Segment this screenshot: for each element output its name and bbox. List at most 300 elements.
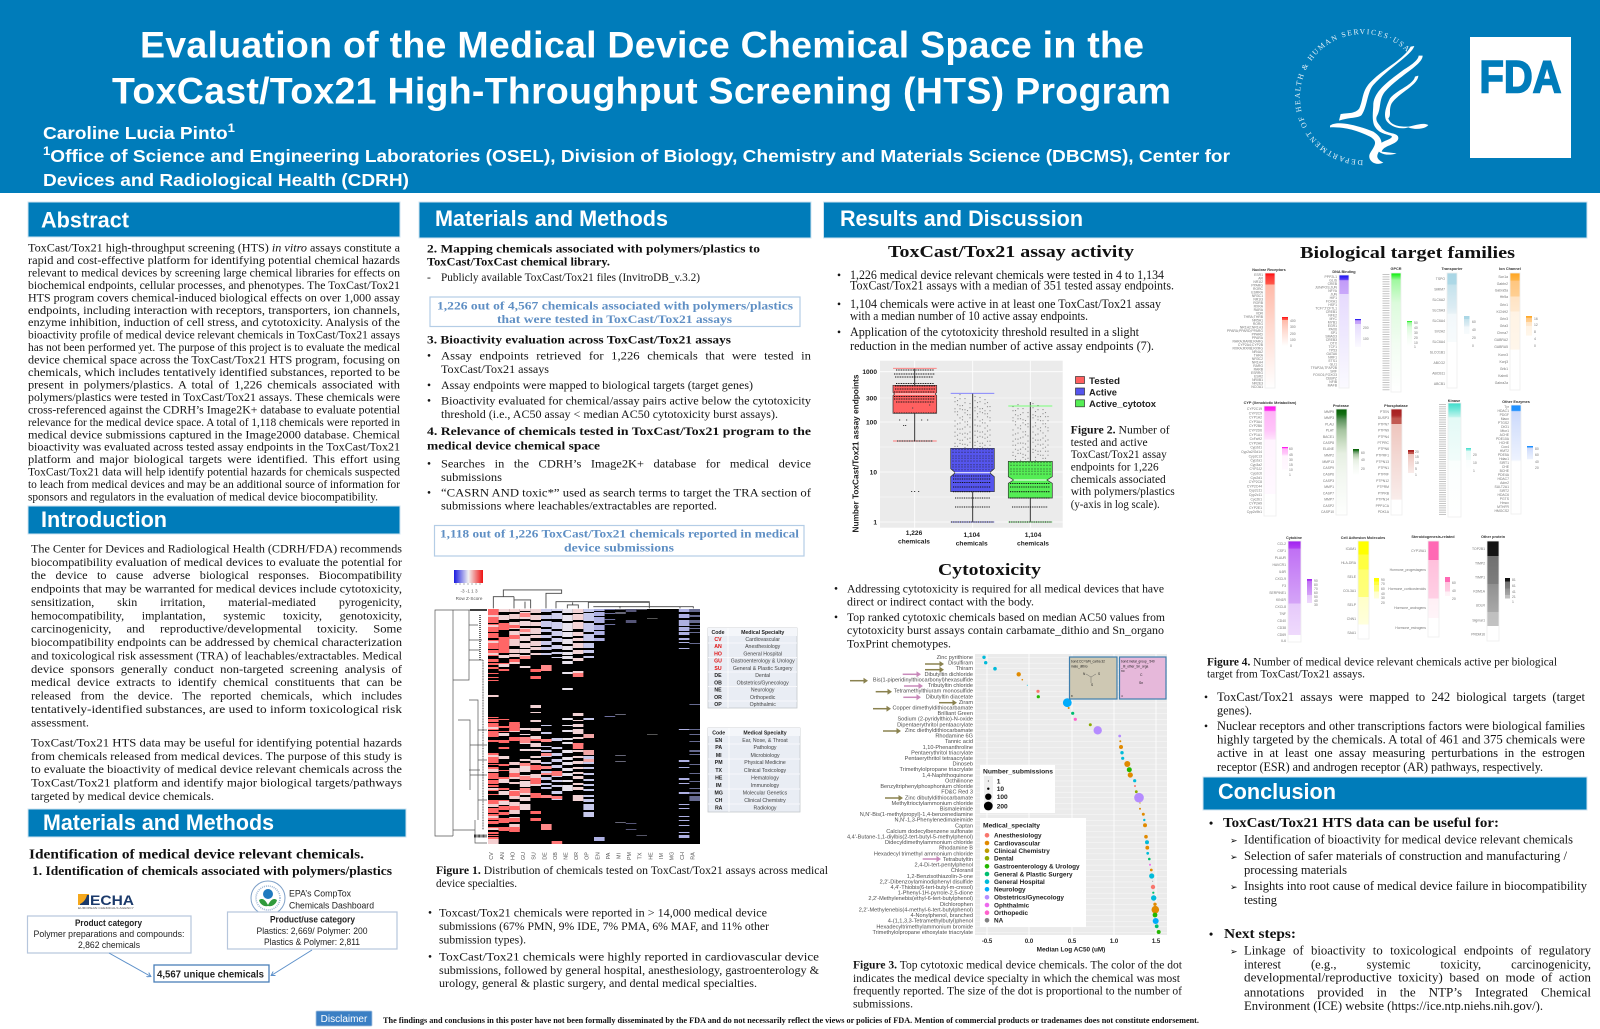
inset: carbamate dithio chemotype <box>1070 657 1117 699</box>
table: specialty codes 2: IM <box>716 783 722 789</box>
heatmap: cytokine: PLAUR <box>1275 556 1287 560</box>
column labels: EN <box>595 852 601 860</box>
heatmap: cytokine: CD40 <box>1277 619 1286 623</box>
heatmap: DNA binding: NFIB <box>1329 380 1338 384</box>
heatmap: steroidogenesis related: CYP19A1 <box>1411 549 1426 553</box>
table: specialty codes 2: Clinical Toxicology <box>744 768 787 774</box>
x axis labels: 1,104 <box>963 532 980 539</box>
heatmap: phosphatase: Phosphatase <box>1384 404 1408 408</box>
author and affiliation <box>43 121 1230 190</box>
heatmap: steroidogenesis related: 60 <box>1452 581 1456 585</box>
heatmap: DNA binding: CEBPZ <box>1326 376 1337 380</box>
caption: figure 2: chemicals associated <box>1071 474 1166 486</box>
text: assay activity bullets <box>837 268 1174 353</box>
text: abstract body: HTS program covers chemical-induced biological effects on over 1,000 assay <box>28 292 400 304</box>
heatmap: DNA binding: EGR1 <box>1328 324 1337 328</box>
caption: figure 4: target from ToxCast/Tox21 assays. <box>1207 668 1365 680</box>
column labels: PM <box>627 851 633 860</box>
heatmap: other enzymes: Hmox <box>1500 501 1509 505</box>
arrow: EPA to unique chemicals <box>272 950 312 975</box>
table: specialty codes 1: OR <box>714 695 722 701</box>
text: introduction paragraph 2: ToxCast/Tox21 platform and identify major biological targets/pathways <box>31 778 403 790</box>
heatmap: kinase: 10 <box>1473 461 1477 465</box>
text: submissions bullets: submission types). <box>439 934 526 946</box>
heading: conclusion <box>1203 777 1587 810</box>
heatmap: ion channel: GABRA5 <box>1494 345 1508 349</box>
heading: abstract <box>28 202 400 237</box>
bubbles <box>982 656 1161 934</box>
heatmap: cytokine: 40 <box>1314 599 1318 603</box>
heatmap: other protein: 41 <box>1512 590 1516 594</box>
table: specialty codes 1: GU <box>714 659 722 665</box>
heatmap: cytokine: 70 <box>1314 587 1318 591</box>
chemical names: 2,2'-Methylenebis(ethyl-6-tert-butylphenol) <box>868 896 973 902</box>
table: specialty codes 1: Anesthesiology <box>745 644 781 650</box>
table: specialty codes 2: PM <box>715 760 723 766</box>
heatmap: DNA binding: 100 <box>1363 337 1369 341</box>
heatmap: transporter: 40 <box>1472 328 1476 332</box>
heatmap: DNA binding: JUN/FOS;JUN <box>1315 286 1338 290</box>
heatmap: other enzymes: HDAC6 <box>1498 493 1509 497</box>
heatmap: transporter: SLCO1B1 <box>1430 350 1445 354</box>
heatmap: CYP xenobiotic metabolism: Cyc2d1 <box>1250 476 1262 480</box>
chart: biological target heatmaps figure 4 <box>1227 267 1539 643</box>
heatmap: steroidogenesis related: 20 <box>1452 597 1456 601</box>
heatmap: protease: MMP2 <box>1324 454 1334 458</box>
callout: 1,118 of 1,226: device submissions <box>564 540 674 554</box>
heatmap: kinase: 20 <box>1473 453 1477 457</box>
x axis: 1.5 <box>1152 939 1161 945</box>
text: step 4: submissions where leachables/extractables are reported. <box>441 500 717 512</box>
heatmap: phosphatase: 10 <box>1415 461 1419 465</box>
text: introduction paragraph 2: to evaluate the bioactivity of medical device relevant chemicals across the <box>31 764 402 776</box>
heatmap: ion channel: 16 <box>1534 317 1538 321</box>
heatmap: steroidogenesis related: Steroidogenesis-related <box>1411 535 1455 539</box>
heatmap: phosphatase: 15 <box>1415 455 1419 459</box>
heatmap: cytokine: IL6 <box>1281 639 1286 643</box>
chemical names: 2,4-Di-tert-pentylphenol <box>915 863 973 869</box>
heatmap: CYP xenobiotic metabolism: CYP2A9 <box>1249 502 1262 506</box>
heatmap: other enzymes: SIRT2 <box>1499 489 1509 493</box>
heatmap: cytokine: Cytokine <box>1286 536 1302 540</box>
heatmap: transporter: TSPO <box>1436 277 1445 281</box>
heatmap: protease: 40 <box>1361 458 1365 462</box>
heading: conclusion: Conclusion <box>1218 779 1336 804</box>
panel: introduction <box>28 506 403 803</box>
chemical names: Bis(1-piperidinylthiocarbonyl)hexasulfide <box>873 677 973 683</box>
text: conclusions list: ➢ <box>1230 883 1238 893</box>
heatmap: other protein: 21 <box>1512 595 1516 599</box>
disclaimer <box>316 1011 1199 1026</box>
text: abstract body: sponsors and regulators in the evaluation of medical device biocompatibility. <box>28 492 378 504</box>
text: step 3 <box>427 332 811 421</box>
text: step 4: “CASRN AND toxic*” used as search terms to target the TRA section of <box>441 488 811 500</box>
text: cytotoxicity bullets <box>834 584 1165 650</box>
text: next steps: developmental/reproductive toxicity) based on mode of action <box>1244 971 1591 985</box>
text: next steps: ➢ <box>1230 948 1238 958</box>
heatmap: phosphatase: PTPN6 <box>1378 447 1389 451</box>
column labels: HO <box>510 852 516 860</box>
text: step 3: threshold (i.e., AC50 assay < median AC50 cytotoxicity burst assays). <box>441 409 778 421</box>
text: cytotoxicity bullets: ToxPrint chemotypes. <box>847 638 951 650</box>
heatmap: other enzymes: Adm2 <box>1500 481 1509 485</box>
heatmap: other protein: UDLR <box>1476 604 1486 608</box>
text: conclusions list: processing materials <box>1244 863 1347 877</box>
x axis labels: chemicals <box>1017 540 1049 548</box>
table: specialty codes 1: Dental <box>755 673 770 679</box>
heatmap: cytokine: CXCL9 <box>1275 577 1286 581</box>
x axis: 1.0 <box>1110 939 1119 945</box>
heatmap: transporter: 20 <box>1472 336 1476 340</box>
heatmap: protease: ELANE <box>1323 447 1335 451</box>
text: step 4: submissions <box>441 472 503 484</box>
chemical names: Chloranil <box>951 868 973 874</box>
x axis labels: chemicals <box>956 540 988 548</box>
column labels <box>489 851 697 860</box>
chemical names: FD&C Red 3 <box>941 790 973 796</box>
table: specialty codes 2: Ear, Nose, & Throat <box>742 738 788 744</box>
table: specialty codes 2: Physical Medicine <box>744 760 786 766</box>
heatmap: cell adhesion molecules: Cell Adhesion Molecules <box>1341 536 1385 540</box>
heatmap: cell adhesion molecules <box>1341 536 1385 639</box>
text: assay activity bullets: with a median number of 10 active assay endpoints. <box>850 309 1088 323</box>
heatmap: DNA binding: MYB1 <box>1328 320 1337 324</box>
heatmap: DNA binding: TFAP2A;TFAP2B <box>1311 366 1338 370</box>
heatmap: ion channel <box>1494 267 1538 390</box>
text: EPA dashboard <box>289 888 374 912</box>
heatmap: cell adhesion molecules: SELP <box>1347 603 1357 607</box>
text: conclusions list: ➢ <box>1230 836 1238 846</box>
column labels: DE <box>542 852 548 860</box>
heatmap: protease: 60 <box>1361 451 1365 455</box>
heatmap: nuclear receptors: ESRRG <box>1251 371 1263 375</box>
text: conclusions list: ToxCast/Tox21 HTS data can be useful for: <box>1223 816 1499 831</box>
chemical names: Dinoseb <box>952 762 973 768</box>
heatmap: transporter: ABCB11 <box>1432 372 1445 376</box>
text: submissions bullets: • <box>428 952 432 964</box>
text: abstract body: bioactivity was evaluated across tested assay endpoints in the ToxCast/Tox21 <box>28 442 400 454</box>
author and affiliation: Caroline Lucia Pinto 1 <box>43 121 235 143</box>
heatmap: cytokine <box>1269 536 1318 643</box>
table: specialty codes 2: MG <box>715 790 723 796</box>
heatmap: other protein: KDM1A <box>1473 590 1486 594</box>
legend: medical specialty: Anesthesiology <box>994 833 1042 840</box>
heatmap: cell adhesion molecules: CNN1 <box>1347 617 1356 621</box>
text: EPA dashboard: EPA’s CompTox <box>289 888 351 900</box>
heatmap: nuclear receptors: NR1I2 <box>1253 280 1263 284</box>
text: conclusions list: • <box>1209 816 1213 830</box>
heatmap: DNA binding: ETS1 <box>1329 359 1337 363</box>
chemical names: Sodium (2-pyridylthio)-N-oxide <box>897 717 973 723</box>
text: cytotoxicity bullets: Top ranked cytotoxic chemicals based on median AC50 values from <box>847 612 1165 624</box>
heatmap: cytokine: 30 <box>1314 603 1318 607</box>
text: abstract body: biochemical endpoints, cellular processes, and phenotypes. The ToxCast/Tox21 <box>28 280 400 292</box>
x axis labels: chemicals <box>898 538 930 546</box>
heatmap: steroidogenesis related <box>1388 535 1456 637</box>
heatmap: protease: MMP13 <box>1322 460 1334 464</box>
text: introduction paragraph 1: endpoints that may be warranted for medical devices include cytotoxicity, <box>31 584 402 596</box>
table: specialty codes 1: General & Plastic Surgery <box>733 666 793 672</box>
heatmap: other enzymes: SIRT1 <box>1499 461 1509 465</box>
chemical names: Tetrabutyltin <box>943 857 973 863</box>
text: assay activity bullets: 1,226 medical device relevant chemicals were tested in 4 to 1,134 <box>850 268 1164 282</box>
heatmap: CYP xenobiotic metabolism: CxFaH2 <box>1250 437 1262 441</box>
text: conclusions list: testing <box>1244 893 1277 907</box>
legend: figure 2 <box>1074 373 1157 410</box>
heatmap: CYP xenobiotic metabolism: Cyp2c11 <box>1249 489 1262 493</box>
heatmap: ion channel: 0 <box>1534 344 1536 348</box>
table: specialty codes 2: MI <box>716 753 722 759</box>
heatmap: nuclear receptors: NR1H2;NR1H3 <box>1240 326 1263 330</box>
y axis: 100 <box>866 420 877 426</box>
heading: results and discussion: Results and Discussion <box>840 206 1083 231</box>
box: EPA product use category: Plastics & Polymer: 2,811 <box>264 937 360 947</box>
table: specialty codes 1: NE <box>714 688 722 694</box>
box: ECHA product category <box>28 916 191 953</box>
column labels: CV <box>489 852 495 860</box>
heatmap: DNA binding: SP1 <box>1331 331 1337 335</box>
text: introduction paragraph 1: biocompatibility endpoints can be addressed by chemical characterization <box>31 637 402 649</box>
heatmap: cell adhesion molecules: 40 <box>1381 592 1385 596</box>
chemical names: Dipentaerythritol pentaacrylate <box>897 722 973 728</box>
heatmap: other enzymes: PDE10A <box>1496 437 1510 441</box>
chemical names: 1-Phenyl-1H-pyrrole-2,5-dione <box>898 891 973 897</box>
heatmap: steroidogenesis related: Hormone_androgens <box>1394 606 1426 610</box>
legend: medical specialty <box>980 818 1086 927</box>
heatmap: nuclear receptors: THRA;THRB <box>1244 315 1264 319</box>
chemical names: Zinc pyrithione <box>937 655 973 661</box>
table: specialty codes 1: Ophthalmic <box>750 702 776 708</box>
legend: number of submissions <box>980 765 1055 813</box>
heatmap: cytokine: CCL2 <box>1277 542 1286 546</box>
text: step 3: Assay endpoints retrieved for 1,226 chemicals that were tested in <box>441 350 811 362</box>
heatmap: GPCR: 50 <box>1414 321 1418 325</box>
heatmap: ion channel: Kalrn6 <box>1498 374 1508 378</box>
author and affiliation: 1Office of Science and Engineering Laboratories (OSEL), Division of Biology, Chemistry and Materials Science (DBCMS), Center for <box>43 144 1230 166</box>
heatmap: nuclear receptors: NR4A2 <box>1252 350 1263 354</box>
text: abstract body: cross-referenced against the CDRH’s Image2K+ database to evaluate potential <box>28 404 400 416</box>
legend: number of submissions: Number_submissions <box>983 768 1053 776</box>
inset: carbamate dithio chemotype: 8 <box>1071 694 1073 698</box>
text: step 3: ToxCast/Tox21 assays <box>441 364 550 376</box>
heatmap: CYP xenobiotic metabolism: CYP2B6 <box>1249 424 1262 428</box>
chart: boxplot figure 2 <box>852 361 1063 548</box>
caption: figure 4 <box>1207 656 1557 680</box>
table: specialty codes 2: TX <box>715 768 723 774</box>
table: specialty codes 1: OP <box>714 702 722 708</box>
heatmap: DNA binding: GLI1 <box>1330 362 1337 366</box>
heatmap: ion channel: Gabra2a <box>1495 381 1508 385</box>
caption: figure 2: Figure 2. Number of <box>1071 424 1170 436</box>
heatmap: nuclear receptors: RORG <box>1253 322 1263 326</box>
inset: Sn organo chemotype <box>1120 657 1166 699</box>
heatmap: CYP xenobiotic metabolism: Cyp2c13 <box>1249 454 1262 458</box>
chemical names: Dichlorophen <box>940 902 973 908</box>
box: ECHA product category: Product category <box>75 918 142 928</box>
heatmap: phosphatase: PTPRC <box>1378 441 1390 445</box>
caption: figure 3: submissions. <box>853 998 913 1010</box>
text: introduction paragraph 1: biocompatibility evaluation of medical devices to evaluate the potential for <box>31 557 402 569</box>
heatmap: GPCR: 30 <box>1414 331 1418 335</box>
heatmap: ion channel: Ion Channel <box>1499 267 1521 271</box>
heatmap: CYP xenobiotic metabolism: CYP2E1 <box>1249 506 1262 510</box>
heatmap: protease: CASP10 <box>1321 510 1334 514</box>
caption: figure 2: (y-axis in log scale). <box>1071 499 1160 511</box>
text: step 4: • <box>427 458 431 470</box>
text: EPA dashboard: Chemicals Dashboard <box>289 900 374 912</box>
heatmap: other protein: TIMP1 <box>1475 576 1485 580</box>
heatmap: DNA binding: NFYA <box>1328 289 1338 293</box>
column labels: OP <box>585 852 591 860</box>
heatmap: CYP xenobiotic metabolism: Cyp2c9b1 <box>1247 510 1262 514</box>
heatmap: protease: Protease <box>1333 404 1349 408</box>
y axis <box>852 369 877 532</box>
heatmap: ion channel: KCNH2 <box>1496 310 1508 314</box>
text: abstract body: ToxCast/Tox21 data will help identify potential hazards for chemicals suspected <box>28 467 400 479</box>
chemical names: 2,2'-Dibenzoylaminodiphenyl disulfide <box>880 879 973 885</box>
heatmap: DNA binding: SMAD3 <box>1325 334 1337 338</box>
heatmap: DNA binding: NRF1 <box>1328 356 1337 360</box>
heatmap: transporter: SV2A2 <box>1434 330 1445 334</box>
column labels: RA <box>691 852 697 860</box>
heatmap: nuclear receptors: CYP2A4;CYP2B <box>1238 343 1264 347</box>
heatmap: GPCR <box>1386 267 1418 392</box>
text: introduction paragraph 1: medical device extracts to identify chemical constituents that can be <box>31 677 402 689</box>
legend: medical specialty: Medical_specialty <box>983 822 1040 830</box>
heatmap: phosphatase: PPP1CA <box>1376 504 1390 508</box>
heatmap: nuclear receptors: 200 <box>1290 332 1296 336</box>
text: disclaimer statement: The findings and conclusions in this poster have not been formally disseminated by the FDA and do not necessarily reflect the views or policies of FDA. Mention of commercial products or tradenames does not constitute endorsement. <box>383 1015 1199 1025</box>
text: next steps: interest (e.g., systemic toxicity, carcinogenicity, <box>1244 958 1591 972</box>
title: Evaluation of the Medical Device Chemical Space in the <box>140 24 1144 66</box>
heatmap: CYP xenobiotic metabolism: CYP2D6 <box>1249 428 1262 432</box>
heatmap: cytokine: 90 <box>1314 579 1318 583</box>
heatmap: nuclear receptors: RARG <box>1253 364 1263 368</box>
table: specialty codes 2: Code <box>712 730 725 736</box>
heatmap: protease: MMP3 <box>1324 416 1334 420</box>
text: abstract body: polymers/plastics were tested in ToxCast/Tox21 assays. These chemicals were <box>28 392 400 404</box>
heatmap: CYP xenobiotic metabolism: 30 <box>1289 458 1293 462</box>
text: abstract body: device chemical space across the ToxCast/Tox21 HTS program, focusing on <box>28 355 400 367</box>
text: step 3: • <box>427 380 431 392</box>
y axis: 1000 <box>862 369 877 376</box>
text: abstract body: chemicals, which includes tentatively identified substances, reported to be <box>28 367 400 379</box>
header banner <box>0 0 1600 193</box>
heatmap: phosphatase: PDK1A <box>1378 510 1390 514</box>
heatmap: nuclear receptors: RORB <box>1253 301 1264 305</box>
heatmap: CYP xenobiotic metabolism <box>1241 401 1297 516</box>
text: submissions bullets: submissions (67% PMN, 9% IDE, 7% PMA, 6% MAF, and 11% other <box>439 921 769 933</box>
heatmap: steroidogenesis related: 40 <box>1452 589 1456 593</box>
legend: medical specialty: General & Plastic Surgery <box>994 871 1073 878</box>
heatmap: CYP xenobiotic metabolism: 15 <box>1289 463 1293 467</box>
icon: FDA logo <box>1470 37 1571 158</box>
heading: materials and methods <box>28 809 406 837</box>
text: step 3: 3. Bioactivity evaluation across ToxCast/Tox21 assays <box>427 332 731 346</box>
legend: figure 2: Active <box>1089 388 1117 398</box>
heatmap: cell adhesion molecules: 20 <box>1381 601 1385 605</box>
text: step 2 <box>427 242 760 284</box>
heatmap: nuclear receptors: PPARA <box>1252 336 1264 340</box>
text: step 2: Publicly available ToxCast/Tox21 files (InvitroDB_v.3.2) <box>441 272 700 284</box>
heatmap: other enzymes: PGTS <box>1500 497 1510 501</box>
heatmap: protease: BACE1 <box>1323 435 1334 439</box>
inset: Sn organo chemotype: _III_other_Sn_orga <box>1120 664 1149 668</box>
heatmap: nuclear receptors: PPARG <box>1251 284 1263 288</box>
text: biological target bullets: ToxCast/Tox21 assays were mapped to 242 biological targets (target <box>1217 690 1586 704</box>
callout: 1,118 of 1,226 <box>434 526 804 556</box>
chemical names: Rhodamine B <box>939 846 973 852</box>
subheading: identification <box>29 848 392 878</box>
chemical names: 4,4'-Thiobis(6-tert-butyl-m-cresol) <box>890 885 973 891</box>
heatmap: CYP xenobiotic metabolism: Cyp2a2/Gd14 <box>1241 450 1262 454</box>
heatmap: protease: CASP9 <box>1323 466 1334 470</box>
text: conclusions list <box>1209 816 1588 907</box>
heatmap: other enzymes: Maox <box>1501 417 1509 421</box>
heatmap: DNA binding <box>1311 270 1369 388</box>
table: specialty codes 1: Medical Specialty <box>741 630 784 636</box>
icon: ECHA logo: EUROPEAN CHEMICALS AGENCY <box>78 906 134 910</box>
heatmap: CYP xenobiotic metabolism: 10 <box>1289 468 1293 472</box>
x axis labels <box>898 530 1049 548</box>
legend: medical specialty: NA <box>994 918 1004 925</box>
text: introduction paragraph 2 <box>31 737 403 803</box>
chemical names: Tetramethylthiuram monosulfide <box>894 689 973 695</box>
caption: figure 3: indicates the medical device specialty in which the chemical was most <box>853 973 1181 985</box>
legend: medical specialty: General Hospital <box>994 879 1045 886</box>
heatmap: CYP xenobiotic metabolism: 45 <box>1289 453 1293 457</box>
table: specialty codes 1: OB <box>714 680 722 686</box>
heatmap: other protein: 81 <box>1512 578 1516 582</box>
column labels: AN <box>500 852 506 860</box>
heatmap: CYP xenobiotic metabolism: Cyp2d1 <box>1250 446 1262 450</box>
text: step 4: Searches in the CDRH’s Image2K+ database for medical device <box>441 458 811 470</box>
y axis: 10 <box>870 470 877 476</box>
heatmap: phosphatase: 1 <box>1415 473 1417 477</box>
heatmap: nuclear receptors: NR5A1 <box>1252 318 1263 322</box>
heatmap: kinase: 1 <box>1473 469 1475 473</box>
heatmap: CYP xenobiotic metabolism: CYP2C44 <box>1247 484 1262 488</box>
heading: abstract: Abstract <box>41 208 130 232</box>
box: EPA product use category: Plastics: 2,669/ Polymer: 200 <box>256 926 368 936</box>
text: submissions bullets: urology, general & plastic surgery, and dental medical specialties. <box>439 978 757 990</box>
table: specialty codes 2: Radiology <box>753 806 777 812</box>
inset: Sn organo chemotype: C <box>1140 673 1143 677</box>
heatmap: nuclear receptors: RARB <box>1254 368 1264 372</box>
callout: 1,226 of 4,567 <box>430 297 800 326</box>
legend: row z-score key <box>454 570 483 601</box>
heatmap: nuclear receptors: NR3C1 <box>1252 294 1263 298</box>
heatmap: protease: PLAT <box>1326 428 1334 432</box>
heatmap: DNA binding: CREB1 <box>1326 310 1337 314</box>
chemical names: Disulfiram <box>948 661 973 667</box>
heatmap: nuclear receptors: THRA <box>1254 354 1264 358</box>
text: step 2: - <box>427 272 431 284</box>
heatmap: protease <box>1321 404 1365 515</box>
heatmap: DNA binding: FOXA1 <box>1326 300 1337 304</box>
heatmap: other enzymes: Other Enzymes <box>1502 400 1530 404</box>
column dendrogram <box>493 590 693 608</box>
heatmap: phosphatase: PTPRF1 <box>1376 454 1389 458</box>
heatmap: nuclear receptors: NR1I3 <box>1253 298 1263 302</box>
heatmap: protease: CASP7 <box>1323 492 1334 496</box>
heatmap: nuclear receptors: RARA;RARB;RARG <box>1232 340 1263 344</box>
heading: results and discussion <box>824 202 1587 238</box>
heatmap: phosphatase: PTPN4 <box>1378 435 1389 439</box>
heatmap: CYP xenobiotic metabolism: CYP2C9 <box>1249 411 1262 415</box>
text: introduction paragraph 1: carcinogenicity, and reproductive/developmental toxicity. Some <box>31 624 402 636</box>
heatmap: GPCR: 40 <box>1414 326 1418 330</box>
